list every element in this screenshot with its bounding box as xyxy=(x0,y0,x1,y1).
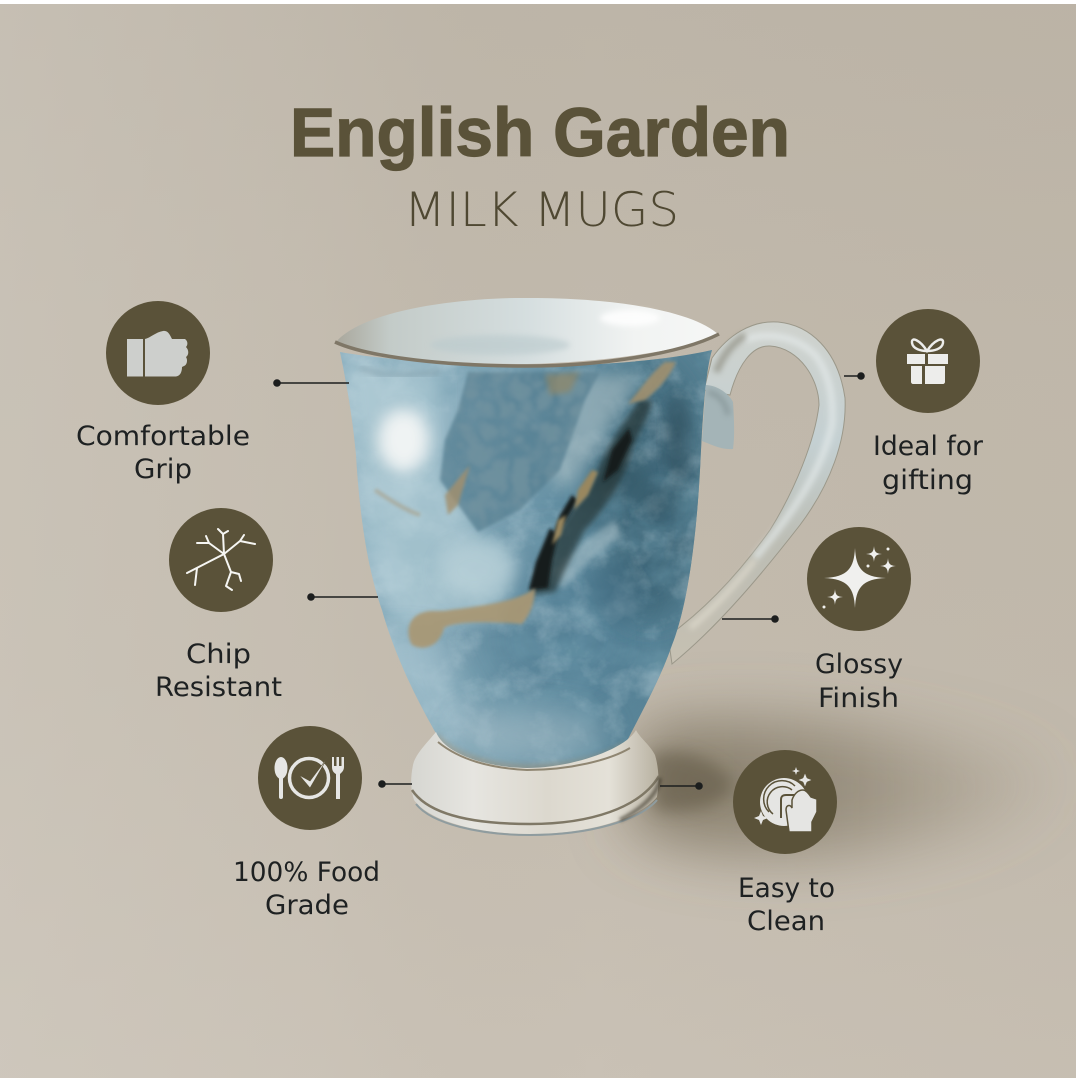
mug illustration xyxy=(330,298,845,835)
callout: chip resistant xyxy=(155,508,378,703)
label: Resistant xyxy=(155,672,282,703)
label: Grade xyxy=(265,890,349,921)
label: gifting xyxy=(882,465,973,496)
pale band right of mottled area xyxy=(548,375,640,490)
icon: fist xyxy=(106,301,210,405)
callout: easy to clean xyxy=(660,750,837,937)
connector line xyxy=(273,379,349,387)
label: Glossy xyxy=(815,649,903,680)
connector line xyxy=(844,372,865,380)
mug ground shadow xyxy=(630,720,1054,854)
label: Grip xyxy=(134,454,192,485)
light left marble xyxy=(345,365,520,625)
icon: plate, spoon and fork xyxy=(258,726,362,830)
label: Easy to xyxy=(738,873,835,904)
icon: cracks xyxy=(169,508,273,612)
callout: glossy finish xyxy=(722,527,911,714)
label: Clean xyxy=(747,906,825,937)
mug handle xyxy=(668,322,845,664)
connector line xyxy=(660,782,703,790)
icon: hand cleaning plate xyxy=(733,750,837,854)
label: 100% Food xyxy=(233,857,380,888)
subtitle: MILK MUGS xyxy=(404,183,679,238)
icon: sparkles xyxy=(807,527,911,631)
callout: food grade xyxy=(233,726,412,921)
icon: gift box xyxy=(876,309,980,413)
right dark marks xyxy=(667,395,689,485)
callout: ideal for gifting xyxy=(844,309,983,496)
label: Ideal for xyxy=(873,431,983,462)
label: Comfortable xyxy=(76,421,250,452)
title: English Garden xyxy=(290,94,790,171)
dark mottled center xyxy=(439,371,598,532)
mug body xyxy=(330,340,720,780)
connector line xyxy=(307,593,378,601)
mug rim xyxy=(335,334,719,366)
mug interior xyxy=(336,298,719,364)
connector line xyxy=(378,780,412,788)
streak xyxy=(530,400,652,595)
label: Finish xyxy=(818,683,899,714)
callout: comfortable grip xyxy=(76,301,349,485)
label: Chip xyxy=(186,639,251,670)
connector line xyxy=(722,615,779,623)
mug foot xyxy=(411,730,660,835)
